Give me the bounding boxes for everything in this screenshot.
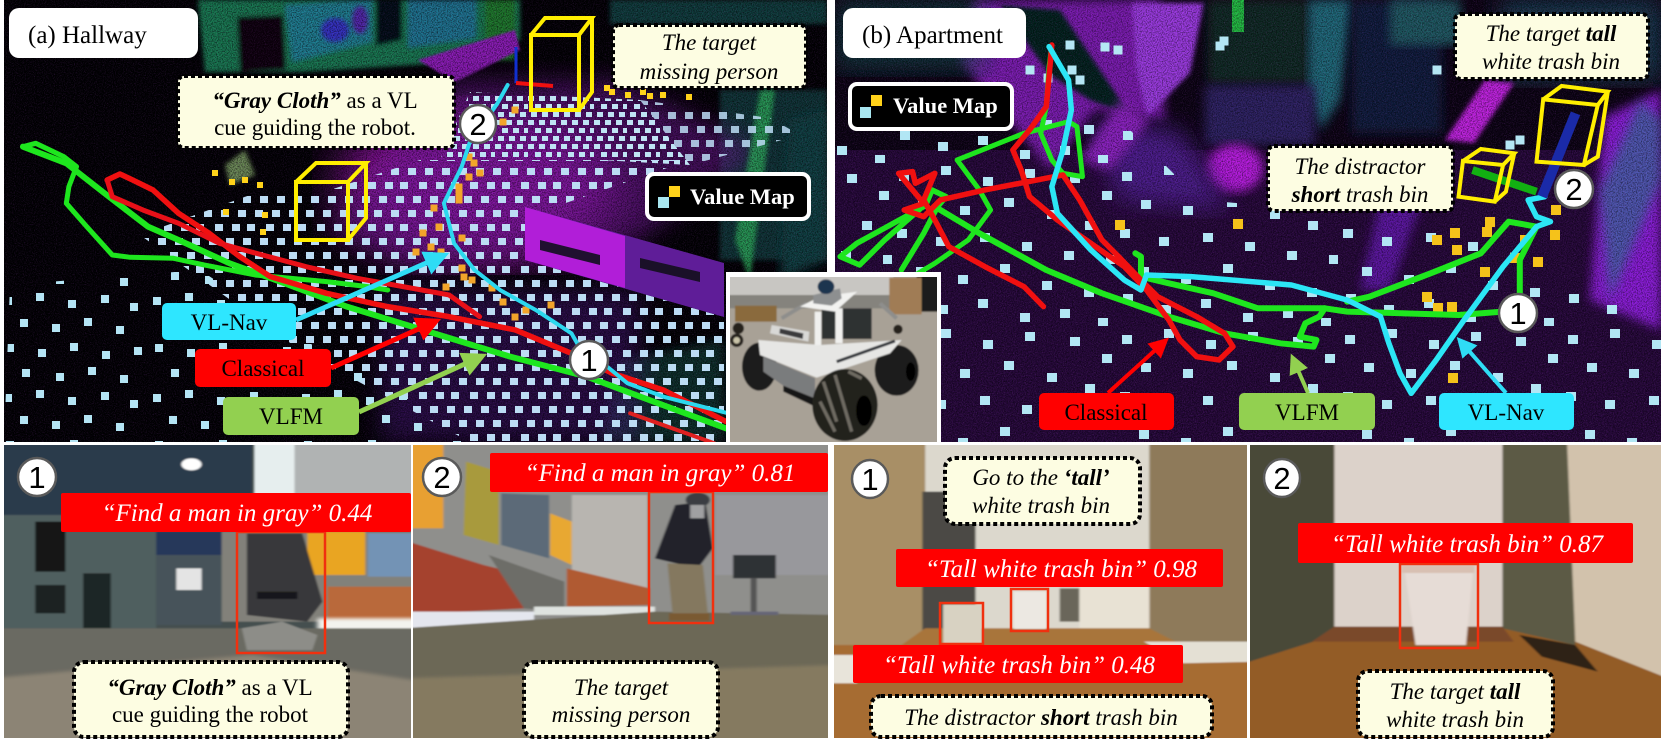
red label: tall bin 0.87: “Tall white trash bin” 0.87 (1331, 531, 1605, 558)
label: VL-Nav (a) (162, 303, 296, 340)
marker 1 (a) (570, 341, 608, 379)
photo panel: hallway view 2 (403, 438, 836, 745)
marker 2 (a) (460, 105, 496, 143)
callout: target person view 2 (524, 662, 718, 737)
callout: target tall bin (1455, 14, 1648, 79)
callout: target person view 2: missing person (552, 702, 690, 727)
heading: (a) Hallway: (a) Hallway (28, 22, 147, 49)
label: VLFM (a) (223, 397, 359, 435)
label: VL-Nav (b): VL-Nav (1468, 400, 1545, 425)
callout: go to tall bin (945, 458, 1140, 524)
callout: go to tall bin: white trash bin (972, 493, 1110, 518)
label: VL-Nav (a): VL-Nav (191, 310, 268, 335)
distractor yellow bounding box (296, 163, 366, 240)
marker 2 (b view 2) (1264, 459, 1300, 497)
trajectory: Classical red (107, 174, 730, 443)
callout: gray cloth view 1 (74, 662, 348, 737)
label: VLFM (b): VLFM (1275, 400, 1339, 425)
marker 1 (b view 1) (852, 460, 888, 498)
label: VL-Nav (b) (1439, 393, 1574, 430)
legend: value map (b): Value Map (893, 93, 998, 118)
callout: gray cloth: “Gray Cloth” as a VL (212, 88, 418, 113)
arrow: VLFM (a) (359, 358, 478, 412)
heading: (b) Apartment: (b) Apartment (862, 22, 1003, 49)
callout: distractor short bin view: The distractor short trash bin (904, 705, 1178, 730)
target yellow bounding box (516, 18, 592, 110)
detection box: person (649, 492, 713, 623)
label: Classical (a) (195, 349, 331, 387)
callout: distractor short bin view (871, 696, 1212, 737)
detection box: short bin (940, 603, 983, 644)
callout: distractor short bin (1268, 146, 1453, 211)
marker 2 (b): 2 (1565, 172, 1583, 207)
trajectory: VLFM green (840, 45, 1537, 347)
value map dots (835, 41, 1661, 442)
marker 2 (a view 2) (423, 458, 461, 496)
label: Classical (b) (1039, 393, 1174, 430)
label: VLFM (a): VLFM (259, 404, 323, 429)
legend: value map (b) (850, 84, 1012, 129)
red label: find a man 0.81 (490, 453, 828, 492)
arrow: Classical (a) (331, 323, 432, 368)
red label: tall bin 0.98 (896, 549, 1223, 587)
arrow: VL-Nav (b) (1462, 343, 1506, 393)
callout: target tall bin: The target tall (1486, 21, 1617, 46)
label: VLFM (b) (1239, 393, 1375, 430)
callout: target tall bin view (1358, 671, 1553, 737)
red label: tall bin 0.87 (1298, 523, 1633, 563)
detection box: tall bin (1011, 589, 1048, 631)
marker 1 (b) (1499, 294, 1537, 332)
marker 1 (a): 1 (580, 343, 598, 378)
callout: target tall bin view: The target tall (1390, 679, 1521, 704)
marker 2 (a view 2): 2 (433, 460, 451, 495)
label: Classical (a): Classical (221, 356, 305, 381)
red label: find a man 0.81: “Find a man in gray” 0.81 (525, 460, 795, 487)
callout: distractor short bin: short trash bin (1291, 182, 1428, 207)
marker 2 (b) (1555, 170, 1593, 208)
label: Classical (b): Classical (1064, 400, 1148, 425)
red label: find a man 0.44: “Find a man in gray” 0.44 (102, 500, 372, 527)
red label: tall bin 0.48 (853, 645, 1183, 683)
heading: (a) Hallway (9, 8, 198, 58)
callout: distractor short bin: The distractor (1295, 154, 1427, 179)
legend: value map (a) (647, 174, 809, 219)
arrow: VLFM (b) (1294, 361, 1308, 393)
couch in point cloud (525, 207, 724, 317)
apartment point cloud scene (835, 0, 1661, 442)
callout: target missing person (613, 25, 806, 88)
marker 1 (a view 1) (18, 458, 56, 496)
trajectory: Classical red (899, 45, 1233, 360)
red label: tall bin 0.48: “Tall white trash bin” 0.48 (883, 652, 1156, 679)
callout: gray cloth view 1: cue guiding the robot (112, 702, 309, 727)
trajectory: VL-Nav cyan (444, 85, 735, 415)
callout: target tall bin view: white trash bin (1386, 707, 1524, 732)
red label: tall bin 0.98: “Tall white trash bin” 0.98 (925, 556, 1198, 583)
trajectory: VL-Nav cyan (1049, 47, 1550, 393)
detection box: tall bin (1400, 564, 1478, 648)
photo: robot inset (726, 272, 941, 442)
marker 1 (b view 1): 1 (861, 462, 879, 497)
panel: (b) apartment value map (835, 0, 1661, 442)
heading: (b) Apartment (843, 8, 1026, 58)
callout: target missing person: The target (662, 30, 757, 55)
photo panel: hallway view 1 (0, 438, 426, 745)
trajectory: VLFM green (23, 143, 735, 432)
marker 2 (a): 2 (469, 107, 487, 142)
legend: value map (a): Value Map (690, 184, 795, 209)
detection box: gray cloth (237, 532, 325, 653)
marker 1 (b): 1 (1509, 296, 1527, 331)
marker 2 (b view 2): 2 (1273, 461, 1291, 496)
hallway point cloud scene (4, 0, 827, 442)
callout: target person view 2: The target (574, 675, 669, 700)
callout: go to tall bin: Go to the ‘tall’ (972, 465, 1110, 490)
callout: target tall bin: white trash bin (1482, 49, 1620, 74)
photo panel: apartment view 2 (1239, 438, 1661, 745)
panel: (a) hallway value map (4, 0, 827, 443)
value map dots (4, 88, 800, 442)
callout: target missing person: missing person (640, 59, 778, 84)
arrow: VL-Nav (a) (296, 257, 440, 320)
callout: gray cloth view 1: “Gray Cloth” as a VL (107, 675, 313, 700)
photo panel: apartment view 1 (824, 438, 1261, 745)
callout: gray cloth: cue guiding the robot. (214, 115, 416, 140)
marker 1 (a view 1): 1 (28, 460, 46, 495)
callout: gray cloth (178, 76, 454, 148)
target tall trash bin box with axis (1459, 86, 1608, 202)
red label: find a man 0.44 (61, 493, 411, 532)
arrow: Classical (b) (1108, 343, 1163, 393)
